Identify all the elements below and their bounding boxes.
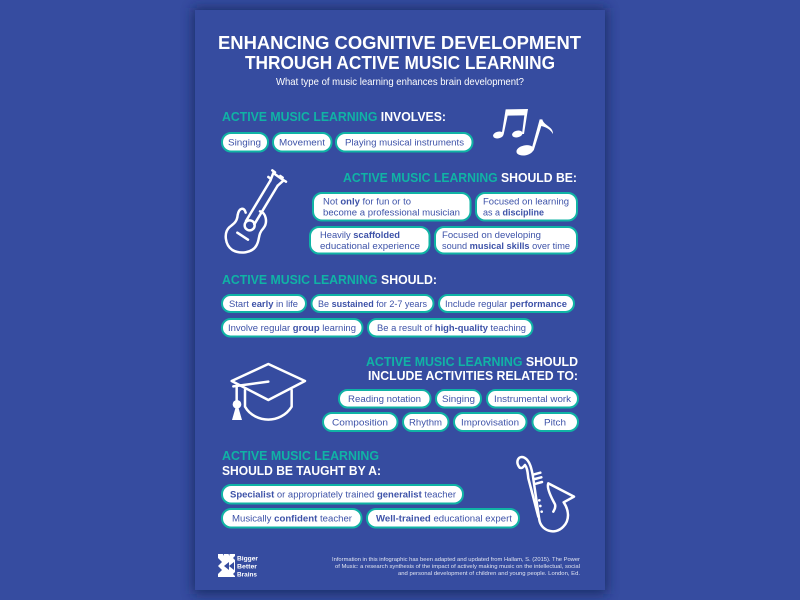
logo mark: [218, 554, 235, 577]
heading: taught by: SHOULD BE TAUGHT BY A:: [222, 463, 381, 478]
pill: singing: [436, 390, 481, 408]
pill: start early: Start early in life: [229, 299, 298, 310]
pill: pitch: [532, 413, 578, 431]
pill: movement: [273, 133, 332, 152]
pill: playing musical instruments: [336, 133, 472, 152]
pill: high-quality teaching: Be a result of high-quality teaching: [377, 323, 526, 334]
pill: not only for fun: Not only for fun or to: [323, 196, 411, 208]
pill: specialist: [222, 485, 463, 504]
pill: composition: Composition: [332, 418, 388, 428]
pill: focused on learning: as a discipline: [483, 208, 544, 218]
source note: [332, 557, 580, 577]
heading: taught by: [222, 448, 381, 478]
heading: activities: INCLUDE ACTIVITIES RELATED TO:: [368, 368, 578, 383]
logo wordmark: Brains: [237, 572, 257, 578]
pill: specialist: Specialist or appropriately trained generalist teacher: [230, 490, 457, 500]
pill: confident teacher: [222, 509, 362, 528]
pill: group learning: Involve regular group learning: [228, 323, 356, 334]
pill: not only for fun: [313, 193, 470, 220]
pill: group learning: [222, 319, 362, 336]
heading: involves: ACTIVE MUSIC LEARNING INVOLVES:: [222, 109, 446, 124]
pill: improvisation: Improvisation: [461, 418, 519, 428]
section: taught by: [222, 448, 519, 528]
icon: saxophone: [517, 457, 574, 531]
heading: activities: [366, 354, 578, 383]
pill: musical skills: sound musical skills over time: [442, 241, 570, 252]
section: activities: [323, 354, 578, 431]
pill: high-quality teaching: [368, 319, 532, 336]
pill: focused on learning: [476, 193, 577, 220]
pill: singing: Singing: [442, 394, 475, 405]
logo wordmark: Better: [237, 564, 258, 570]
pill: heavily scaffolded: Heavily scaffolded: [320, 230, 400, 241]
pill: rhythm: [403, 413, 448, 431]
source note: of Music: a research synthesis of the impact of actively making music on the intellectual, social: [335, 564, 580, 570]
pill: improvisation: [454, 413, 526, 431]
title: ENHANCING COGNITIVE DEVELOPMENT: [218, 33, 581, 53]
poster panel: [195, 10, 605, 590]
pill: performance: [439, 295, 574, 312]
title: THROUGH ACTIVE MUSIC LEARNING: [245, 53, 555, 73]
icon: guitar: [226, 170, 286, 253]
pill: not only for fun: become a professional musician: [323, 208, 460, 218]
heading: should be: ACTIVE MUSIC LEARNING SHOULD BE:: [343, 170, 577, 185]
section: should be: [310, 170, 577, 254]
pill: instrumental work: [487, 390, 578, 408]
pill: sustained: [312, 295, 434, 312]
pill: rhythm: Rhythm: [409, 418, 442, 428]
pill: sustained: Be sustained for 2-7 years: [318, 299, 427, 310]
pill: movement: Movement: [279, 138, 325, 148]
heading: should: ACTIVE MUSIC LEARNING SHOULD:: [222, 272, 437, 287]
logo wordmark: Bigger: [237, 556, 259, 562]
pill: musical skills: [435, 227, 577, 254]
pill: heavily scaffolded: [310, 227, 430, 254]
pill: instrumental work: Instrumental work: [494, 394, 571, 405]
icon: graduation cap: [232, 364, 305, 420]
pill: composition: [323, 413, 398, 431]
section: involves: [222, 109, 472, 152]
pill: focused on learning: Focused on learning: [483, 196, 569, 208]
icon: music notes: [492, 109, 553, 157]
pill: confident teacher: Musically confident teacher: [232, 514, 353, 524]
heading: taught by: ACTIVE MUSIC LEARNING: [222, 448, 379, 463]
pill: playing musical instruments: Playing musical instruments: [345, 138, 464, 148]
pill: performance: Include regular performance: [445, 299, 567, 310]
pill: singing: [222, 133, 268, 152]
subtitle: What type of music learning enhances brain development?: [276, 77, 524, 88]
heading: activities: ACTIVE MUSIC LEARNING SHOULD: [366, 354, 578, 369]
pill: reading notation: Reading notation: [348, 394, 421, 405]
pill: musical skills: Focused on developing: [442, 230, 541, 241]
logo wordmark: [237, 556, 259, 578]
pill: pitch: Pitch: [544, 418, 566, 428]
source note: Information in this infographic has been adapted and updated from Hallam, S. (2015). The Power: [332, 557, 580, 563]
logo: Bigger Better Brains: [218, 554, 259, 578]
title: [218, 33, 581, 73]
section: should: [222, 272, 574, 336]
pill: start early: [222, 295, 306, 312]
pill: educational expert: Well-trained educational expert: [376, 514, 512, 524]
pill: singing: Singing: [228, 138, 261, 148]
source note: and personal development of children and young people. London, Ed.: [398, 571, 580, 577]
pill: heavily scaffolded: educational experience: [320, 241, 420, 252]
pill: educational expert: [367, 509, 519, 528]
pill: reading notation: [339, 390, 430, 408]
